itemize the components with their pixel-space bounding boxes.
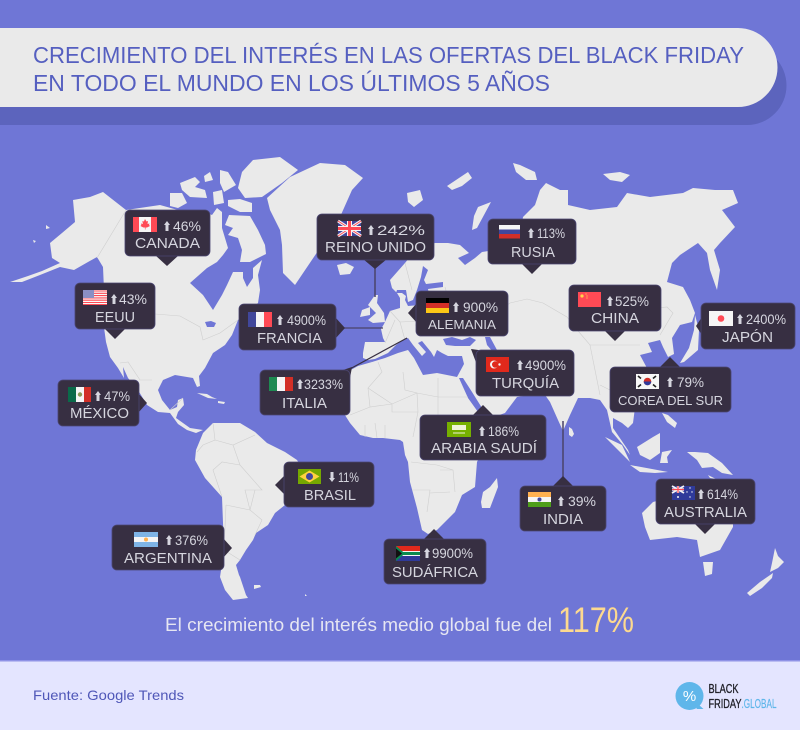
label: Australia: AUSTRALIA	[664, 504, 747, 521]
flag: México	[68, 387, 91, 402]
label: Corea del Sur: COREA DEL SUR	[618, 393, 723, 408]
flag: Brasil	[298, 469, 321, 484]
header banner	[0, 28, 786, 125]
label: Alemania: ALEMANIA	[428, 317, 496, 332]
label: Brasil: 11%	[338, 469, 359, 485]
label: India: 39%	[568, 493, 596, 509]
label: Sudáfrica	[384, 529, 486, 584]
label: Francia: 4900%	[287, 312, 326, 328]
label: Japón: JAPÓN	[722, 329, 773, 346]
label: China: 525%	[615, 293, 649, 309]
global average statement: El crecimiento del interés medio global fue del	[165, 615, 552, 635]
label: Reino Unido: REINO UNIDO	[325, 239, 426, 256]
flag: Australia	[672, 486, 695, 500]
label: México: MÉXICO	[70, 405, 129, 422]
flag: Italia	[269, 377, 293, 391]
title: EN TODO EL MUNDO EN LOS ÚLTIMOS 5 AÑOS	[33, 70, 550, 96]
label: Rusia: 113%	[537, 225, 565, 241]
label: Japón: 2400%	[746, 311, 786, 327]
logo: Black Friday Global	[676, 681, 776, 711]
label: Arabia Saudí: 186%	[488, 423, 519, 439]
title: CRECIMIENTO DEL INTERÉS EN LAS OFERTAS DEL BLACK FRIDAY	[33, 42, 744, 68]
flag: Reino Unido	[338, 221, 361, 236]
label: Canadá	[125, 210, 210, 266]
label: Arabia Saudí: ARABIA SAUDÍ	[431, 440, 538, 457]
label: Corea del Sur	[610, 357, 731, 412]
label: Argentina: 376%	[175, 532, 208, 548]
label: Turquía: TURQUÍA	[492, 375, 559, 392]
label: Arabia Saudí	[420, 405, 546, 460]
flag: Rusia	[499, 225, 520, 238]
label: Brasil: BRASIL	[304, 487, 356, 504]
flag: Sudáfrica	[396, 546, 420, 561]
label: Canadá: 46%	[173, 218, 201, 234]
label: Sudáfrica: 9900%	[432, 545, 473, 561]
label: Alemania: 900%	[463, 299, 498, 315]
label: Francia: FRANCIA	[257, 330, 322, 347]
title	[33, 42, 744, 96]
flag: Arabia Saudí	[447, 422, 471, 437]
label: EEUU: 43%	[119, 291, 147, 307]
label: Canadá: CANADA	[135, 235, 200, 252]
label: Italia: 3233%	[304, 376, 343, 392]
label: Brasil	[275, 462, 374, 507]
flag: Japón	[709, 311, 733, 326]
logo: Black Friday Global: FRIDAY	[708, 696, 742, 711]
label: Rusia: RUSIA	[511, 244, 555, 261]
label: Reino Unido: 242%	[377, 222, 425, 238]
label: Reino Unido	[317, 214, 434, 297]
label: Turquía: 4900%	[525, 357, 566, 373]
label: Australia	[656, 479, 755, 534]
flag: China	[578, 292, 601, 307]
flag: Francia	[248, 312, 272, 327]
flag: EEUU	[83, 290, 107, 305]
footer band	[0, 660, 800, 730]
world map	[10, 157, 784, 600]
flag: Argentina	[134, 532, 158, 547]
label: India	[520, 421, 606, 531]
label: Alemania	[408, 291, 508, 336]
label: Corea del Sur: 79%	[677, 374, 704, 390]
logo: Black Friday Global: %	[683, 688, 696, 705]
flag: Alemania	[426, 298, 449, 313]
logo: Black Friday Global: .GLOBAL	[742, 696, 776, 711]
flag: India	[528, 492, 551, 507]
label: China: CHINA	[591, 310, 639, 327]
label: EEUU	[75, 283, 155, 339]
label: Italia: ITALIA	[282, 395, 327, 412]
label: Japón	[696, 303, 795, 349]
label: Francia	[239, 304, 383, 350]
label: Argentina	[112, 525, 232, 570]
highlighted figure: 117%	[558, 601, 634, 640]
label: Turquía	[471, 349, 574, 396]
flag: Corea del Sur	[636, 374, 659, 389]
label: Sudáfrica: SUDÁFRICA	[392, 564, 478, 581]
logo: Black Friday Global: BLACK	[708, 681, 739, 696]
label: China	[569, 285, 661, 341]
flag: Canadá	[133, 217, 157, 232]
label: EEUU: EEUU	[95, 309, 135, 326]
label: India: INDIA	[543, 511, 583, 528]
source: Fuente: Google Trends	[33, 687, 184, 703]
label: Argentina: ARGENTINA	[124, 550, 212, 567]
label: México: 47%	[104, 388, 130, 404]
flag: Turquía	[486, 357, 509, 372]
label: Rusia	[488, 219, 576, 274]
label: México	[58, 380, 147, 426]
label: Australia: 614%	[707, 486, 738, 502]
label: Italia	[260, 338, 407, 415]
global average statement	[165, 601, 634, 640]
